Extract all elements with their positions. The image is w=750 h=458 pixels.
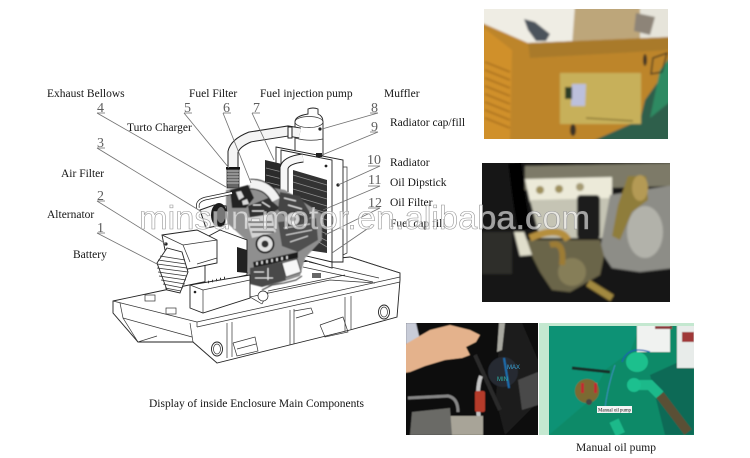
callout 12	[325, 196, 382, 235]
callout 3	[97, 136, 202, 212]
diagram: generator set line drawing	[113, 108, 400, 363]
posts	[226, 323, 228, 358]
callout 8	[322, 101, 378, 129]
callout 4: 4	[97, 101, 104, 116]
turbo and intake pipe	[250, 184, 276, 200]
muffler	[295, 108, 323, 172]
photo: fuel injection pump	[478, 160, 674, 306]
callout 7: 7	[253, 101, 260, 116]
manual oil pump tag: Manual oil pump	[598, 408, 632, 414]
front bracket	[282, 259, 301, 277]
photo: yellow enclosure with control panel	[480, 5, 672, 143]
frame lifting holes	[212, 342, 222, 356]
callout 3: 3	[97, 136, 104, 151]
pulley	[256, 236, 274, 252]
callout 9	[322, 120, 378, 155]
callout 1	[97, 221, 157, 264]
manual oil pump tag	[597, 406, 632, 414]
callout 10: 10	[367, 153, 381, 168]
label: Fuel Filter: Fuel Filter	[189, 88, 237, 100]
callout 5	[184, 101, 229, 168]
callout 9: 9	[371, 120, 378, 135]
callout 6	[223, 101, 251, 183]
callout 10	[338, 153, 381, 185]
callout 11: 11	[368, 173, 381, 188]
label: Alternator: Alternator	[47, 209, 94, 221]
caption: manual oil pump: Manual oil pump	[576, 442, 656, 454]
callout 8: 8	[371, 101, 378, 116]
radiator	[265, 147, 347, 268]
label: Exhaust Bellows: Exhaust Bellows	[47, 88, 125, 100]
callout 4	[97, 101, 226, 187]
engine block	[226, 184, 322, 290]
watermark: minsun-motor.en.alibaba.com	[139, 199, 590, 236]
exhaust pipe and bellows	[226, 127, 300, 188]
lower engine parts	[250, 262, 286, 287]
crank rail	[253, 252, 298, 268]
callout 1: 1	[97, 221, 104, 236]
label: Radiator cap/fill: Radiator cap/fill	[390, 117, 465, 129]
caption: main components: Display of inside Enclosure Main Components	[149, 398, 365, 410]
callout 2: 2	[97, 189, 104, 204]
label: Oil Dipstick: Oil Dipstick	[390, 177, 447, 189]
label: Fuel cap fill: Fuel cap fill	[390, 218, 446, 230]
label: Muffler: Muffler	[384, 88, 420, 100]
label: Fuel injection pump: Fuel injection pump	[260, 88, 353, 100]
gussets	[233, 337, 258, 356]
label: Turto Charger: Turto Charger	[127, 122, 192, 134]
callout lines and part numbers	[97, 101, 382, 264]
label: Radiator: Radiator	[390, 157, 430, 169]
callout fuel cap	[332, 227, 370, 253]
callout 12: 12	[368, 196, 382, 211]
battery	[190, 275, 250, 313]
MAX and MIN marks	[498, 364, 520, 381]
label: Air Filter: Air Filter	[61, 168, 104, 180]
MAX and MIN marks: MAX	[507, 365, 520, 371]
callout 6: 6	[223, 101, 230, 116]
photo: manual oil pump background	[539, 323, 694, 435]
label: Battery: Battery	[73, 249, 107, 261]
callout 5: 5	[184, 101, 191, 116]
photo: manual oil pump	[549, 326, 694, 435]
component labels	[47, 88, 465, 261]
photo: oil dipstick min max	[406, 323, 538, 435]
callout 7	[252, 101, 274, 160]
air filter	[198, 193, 232, 228]
callout 11	[323, 173, 381, 210]
callout 2	[97, 189, 166, 244]
alternator	[157, 230, 247, 293]
MAX and MIN marks: MIN	[497, 377, 508, 383]
label: Oil Filter: Oil Filter	[390, 197, 433, 209]
skid base frame	[113, 257, 400, 363]
